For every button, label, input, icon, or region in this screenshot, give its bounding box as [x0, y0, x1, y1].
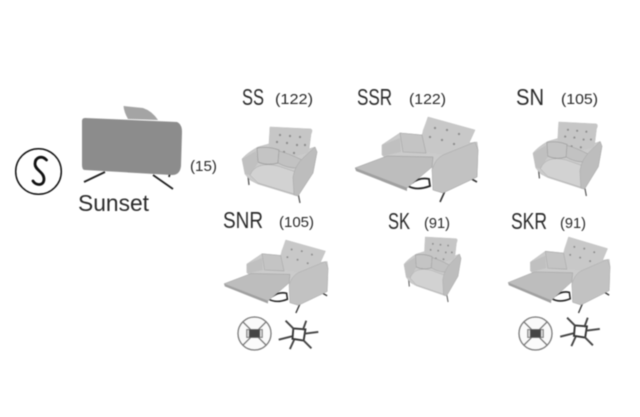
icon: S badge [16, 149, 61, 194]
icon: SNR round base [238, 317, 271, 350]
module SS: (122) [275, 91, 313, 108]
module SSR [355, 84, 478, 202]
module SNR [223, 207, 328, 313]
icon: SNR frame [279, 321, 318, 349]
module SKR [508, 208, 610, 313]
module SN: (105) [561, 91, 598, 108]
icon: SKR round base [519, 317, 552, 350]
module SK: SK [388, 208, 410, 234]
module SKR: (91) [560, 215, 586, 232]
width: (15): (15) [190, 158, 217, 175]
module SNR: SNR [223, 207, 263, 233]
module SN: SN [516, 84, 544, 110]
product name: Sunset: Sunset [78, 190, 149, 216]
module SS [242, 84, 317, 203]
icon: SKR frame [560, 318, 600, 346]
product: Sunset back view [82, 106, 182, 189]
module SS: SS [242, 84, 264, 110]
module SKR: SKR [511, 208, 547, 234]
module SN [516, 84, 602, 196]
module SK [388, 208, 461, 302]
module SSR: (122) [409, 91, 446, 108]
module SNR: (105) [279, 214, 314, 231]
module SSR: SSR [357, 84, 392, 110]
module SK: (91) [424, 215, 450, 232]
